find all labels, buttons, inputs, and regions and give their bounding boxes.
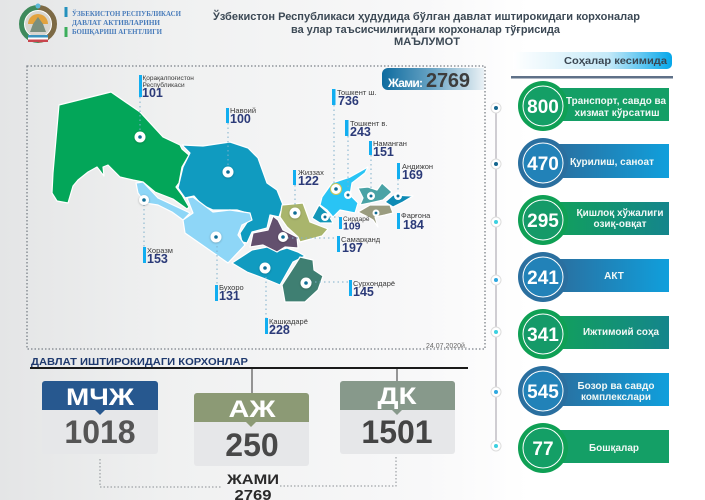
label: Karakalpakstan: 101 bbox=[142, 86, 163, 100]
label: Navoi: 100 bbox=[230, 112, 251, 126]
card: МЧЖ: МЧЖ bbox=[66, 384, 134, 411]
label: Syrdarya bbox=[339, 216, 370, 232]
sector: markets: 545 bbox=[527, 382, 559, 403]
label: Navoi bbox=[226, 106, 256, 126]
label: Andijan: 169 bbox=[402, 168, 423, 182]
total text: ЖАМИ bbox=[226, 471, 279, 487]
agency name: ДАВЛАТ АКТИВЛАРИНИ bbox=[72, 18, 160, 27]
card: АЖ: 250 bbox=[225, 427, 279, 463]
label: Khorezm: 153 bbox=[147, 252, 168, 266]
sector: social: Ижтимоий соҳа bbox=[583, 327, 659, 338]
label: Tashkent city bbox=[332, 88, 376, 108]
map frame bbox=[27, 66, 485, 349]
label: Surkhandarya: 145 bbox=[353, 285, 374, 299]
sector: agriculture: 295 bbox=[527, 211, 559, 232]
region: Navoi bbox=[178, 142, 283, 243]
label: Bukhara bbox=[215, 283, 244, 303]
total text bbox=[226, 471, 279, 500]
region: Kashkadarya bbox=[232, 247, 305, 285]
label: Karakalpakstan bbox=[139, 75, 194, 100]
emblem logo bbox=[19, 4, 57, 43]
region: Samarkand bbox=[250, 216, 298, 252]
label: Samarkand: Самарқанд bbox=[341, 235, 381, 244]
sector: markets bbox=[518, 366, 669, 416]
label: Fergana: Фарғона bbox=[401, 211, 431, 220]
sector: construction: 470 bbox=[527, 154, 559, 175]
region: Tashkent bbox=[320, 167, 368, 217]
card: ДК: 1501 bbox=[361, 414, 433, 450]
label: Syrdarya: Сирдарё bbox=[343, 216, 370, 223]
heading: state enterprises: ДАВЛАТ ИШТИРОКИДАГИ КОРХОНЛАР bbox=[31, 356, 248, 368]
label: Tashkent region bbox=[345, 119, 387, 139]
sector: social bbox=[518, 309, 669, 359]
map of regions bbox=[52, 92, 413, 302]
label: Khorezm bbox=[143, 246, 173, 266]
date: 24.07.2020й. bbox=[426, 342, 467, 350]
label: Tashkent region: Тошкент в. bbox=[350, 119, 387, 128]
region: Surkhandarya bbox=[282, 257, 323, 302]
label: Andijan: Андижон bbox=[402, 162, 433, 171]
label: Namangan: 151 bbox=[373, 145, 394, 159]
region: Karakalpakstan bbox=[52, 92, 189, 209]
label: Andijan bbox=[397, 162, 433, 182]
label: Kashkadarya: Қашқадарё bbox=[269, 317, 308, 326]
connectors bbox=[252, 369, 397, 393]
total badge: Жами: bbox=[387, 76, 423, 90]
label: Surkhandarya bbox=[349, 279, 395, 299]
label: Tashkent city: Тошкент ш. bbox=[337, 88, 376, 97]
label: Karakalpakstan: Республикаси bbox=[142, 81, 185, 89]
label: Kashkadarya: 228 bbox=[269, 323, 290, 337]
total badge bbox=[382, 68, 484, 92]
label: Khorezm: Хоразм bbox=[147, 246, 173, 255]
label: Namangan bbox=[369, 139, 407, 159]
label: Samarkand bbox=[337, 235, 381, 255]
label: Tashkent city: 736 bbox=[338, 94, 359, 108]
sector: agriculture: озиқ-овқат bbox=[594, 219, 647, 230]
sector: social: 341 bbox=[527, 325, 559, 346]
region: Fergana bbox=[358, 205, 393, 227]
region: Bukhara bbox=[183, 197, 252, 263]
sector: ICT: АКТ bbox=[604, 271, 624, 282]
leader lines bbox=[140, 97, 398, 318]
label: Fergana bbox=[397, 211, 431, 232]
sector: construction bbox=[518, 138, 669, 188]
label: Fergana: 184 bbox=[403, 218, 424, 232]
label: Syrdarya: 109 bbox=[343, 220, 361, 232]
label: Kashkadarya bbox=[265, 317, 308, 337]
card: ДК bbox=[340, 381, 455, 454]
sector header: Соҳалар кесимида bbox=[564, 55, 667, 67]
sector: agriculture bbox=[518, 195, 669, 245]
sector: ICT: 241 bbox=[527, 268, 559, 289]
label: Bukhara: 131 bbox=[219, 289, 240, 303]
sector: markets: Бозор ва савдо bbox=[578, 381, 654, 392]
label: Samarkand: 197 bbox=[342, 241, 363, 255]
title bbox=[212, 10, 640, 48]
label: Namangan: Наманган bbox=[373, 139, 407, 148]
card: МЧЖ: 1018 bbox=[64, 414, 136, 450]
label: Tashkent region: 243 bbox=[350, 125, 371, 139]
region: Jizzakh bbox=[280, 203, 328, 242]
label: Karakalpakstan: Қорақалпоғистон bbox=[142, 75, 194, 82]
card: АЖ: АЖ bbox=[228, 396, 276, 423]
total bracket bbox=[100, 457, 396, 487]
agency name: БОШҚАРИШ АГЕНТЛИГИ bbox=[72, 27, 162, 36]
label: Jizzakh: Жиззах bbox=[298, 168, 324, 177]
label: Jizzakh: 122 bbox=[298, 174, 319, 188]
sector: others bbox=[518, 423, 669, 473]
sector header bbox=[511, 52, 673, 78]
sector: others: Бошқалар bbox=[589, 443, 639, 454]
label: Jizzakh bbox=[293, 168, 324, 188]
sector: transport: Транспорт, савдо ва bbox=[566, 96, 666, 107]
sector: others: 77 bbox=[532, 439, 554, 460]
region: Syrdarya bbox=[312, 205, 333, 223]
region: Andijan bbox=[385, 195, 413, 207]
title: ва улар таъсисчилигидаги корхоналар тўғрисида bbox=[291, 24, 561, 36]
sector: transport: хизмат кўрсатиш bbox=[574, 107, 660, 119]
sector: transport: 800 bbox=[527, 97, 559, 118]
region: Namangan bbox=[358, 183, 392, 205]
sector: ICT bbox=[518, 252, 669, 302]
sector: construction: Қурилиш, саноат bbox=[570, 157, 654, 168]
timeline bbox=[491, 103, 501, 451]
total badge: 2769 bbox=[426, 70, 470, 92]
label: Bukhara: Бухоро bbox=[219, 283, 244, 292]
sector: transport bbox=[518, 81, 669, 131]
label: Surkhandarya: Сурхондарё bbox=[353, 279, 395, 288]
agency name bbox=[64, 7, 181, 37]
label: Navoi: Навоий bbox=[230, 106, 256, 115]
agency name: ЎЗБЕКИСТОН РЕСПУБЛИКАСИ bbox=[72, 8, 181, 18]
sector: markets: комплекслари bbox=[581, 392, 651, 403]
title: МАЪЛУМОТ bbox=[394, 36, 460, 48]
card: АЖ bbox=[194, 393, 309, 466]
title: Ўзбекистон Республикаси ҳудудида бўлган давлат иштирокидаги корхоналар bbox=[212, 10, 640, 23]
region: Khorezm bbox=[136, 182, 190, 220]
card: ДК: ДК bbox=[378, 383, 417, 410]
card: МЧЖ bbox=[42, 381, 158, 454]
map pins bbox=[134, 132, 402, 288]
sector: agriculture: Қишлоқ хўжалиги bbox=[576, 207, 664, 219]
